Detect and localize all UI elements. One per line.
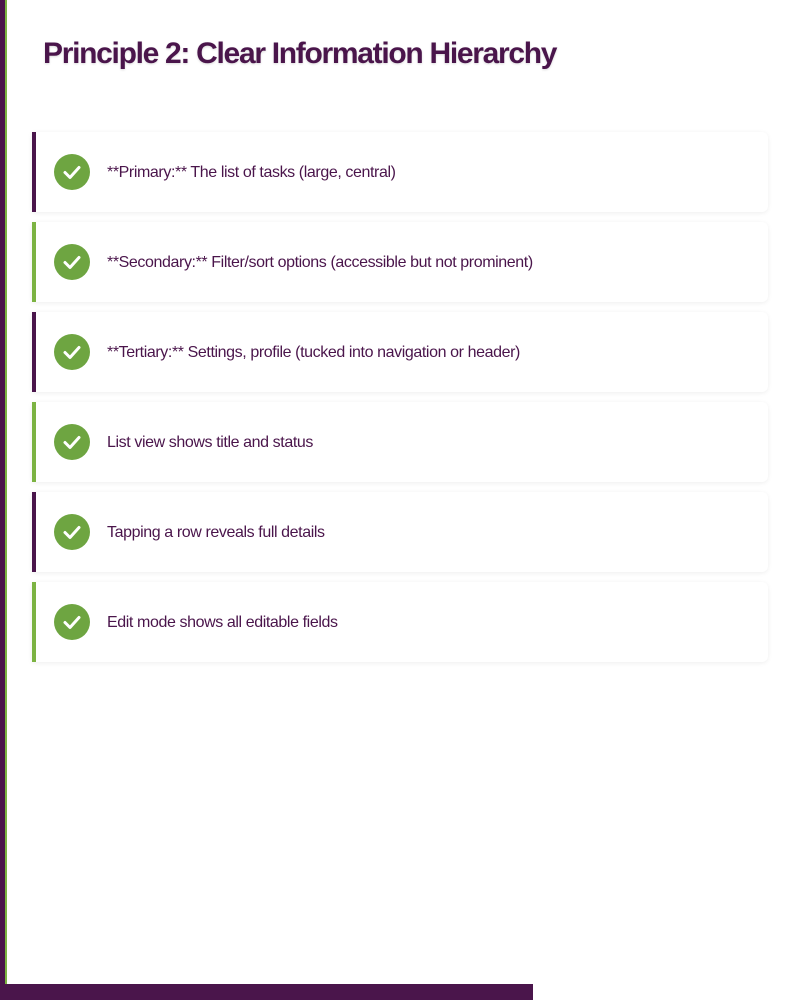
title: Principle 2: Clear Information Hierarchy: [43, 37, 556, 70]
bottom bar: [0, 984, 533, 1000]
icon: check: [54, 154, 90, 190]
card: primary: [32, 132, 768, 212]
card: edit mode: [32, 582, 768, 662]
card: tapping: [32, 492, 768, 572]
icon: check: [54, 424, 90, 460]
icon: check: [54, 334, 90, 370]
card: secondary: [32, 222, 768, 302]
icon: check: [54, 514, 90, 550]
text: tapping: Tapping a row reveals full details: [107, 524, 325, 541]
text: tertiary: **Tertiary:** Settings, profile (tucked into navigation or header): [107, 344, 520, 361]
text: primary: **Primary:** The list of tasks (large, central): [107, 164, 396, 181]
icon: check: [54, 244, 90, 280]
text: list view: List view shows title and status: [107, 434, 313, 451]
icon: check: [54, 604, 90, 640]
text: edit mode: Edit mode shows all editable fields: [107, 614, 338, 631]
card: list view: [32, 402, 768, 482]
text: secondary: **Secondary:** Filter/sort options (accessible but not prominent): [107, 254, 533, 271]
card: tertiary: [32, 312, 768, 392]
